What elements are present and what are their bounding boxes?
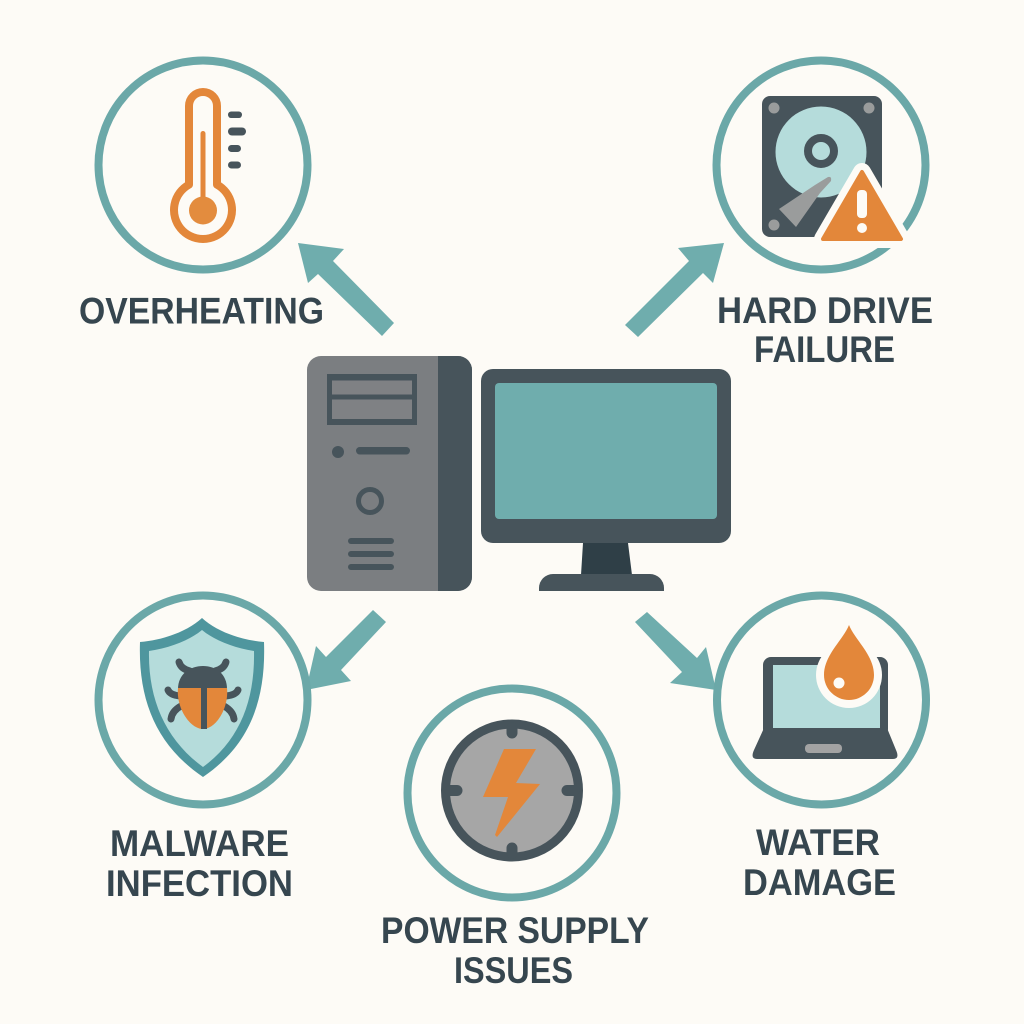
label: hard drive failure: HARD DRIVE: [717, 290, 933, 331]
panel: hard drive failure: [716, 60, 933, 370]
tower: [307, 356, 472, 591]
panel: water damage: [717, 596, 926, 903]
panel: power supply issues: [381, 688, 649, 991]
label: overheating: OVERHEATING: [79, 290, 324, 332]
label: power supply issues: ISSUES: [454, 950, 573, 991]
central computer: [307, 356, 731, 591]
icon: laptop with water drop: [717, 596, 926, 804]
label: hard drive failure: FAILURE: [754, 329, 895, 370]
label: power supply issues: [381, 910, 649, 991]
arrow: to overheating: [298, 243, 394, 336]
panel: overheating: [79, 60, 324, 332]
monitor: [481, 369, 731, 591]
label: malware infection: [106, 823, 293, 904]
label: hard drive failure: [717, 290, 933, 370]
label: malware infection: INFECTION: [106, 863, 293, 904]
icon: shield with bug: [98, 596, 308, 804]
label: water damage: WATER: [756, 822, 880, 863]
icon: power gauge with lightning bolt: [408, 688, 616, 898]
panel: malware infection: [98, 596, 308, 904]
arrow: to malware infection: [306, 610, 386, 690]
label: water damage: [743, 822, 896, 903]
label: water damage: DAMAGE: [743, 862, 896, 903]
arrow: to water damage: [635, 612, 716, 690]
icon: thermometer: [98, 60, 308, 270]
arrow: to hard drive failure: [625, 243, 724, 337]
label: malware infection: MALWARE: [110, 823, 289, 864]
label: power supply issues: POWER SUPPLY: [381, 910, 649, 951]
icon: hard drive with warning: [716, 60, 926, 270]
